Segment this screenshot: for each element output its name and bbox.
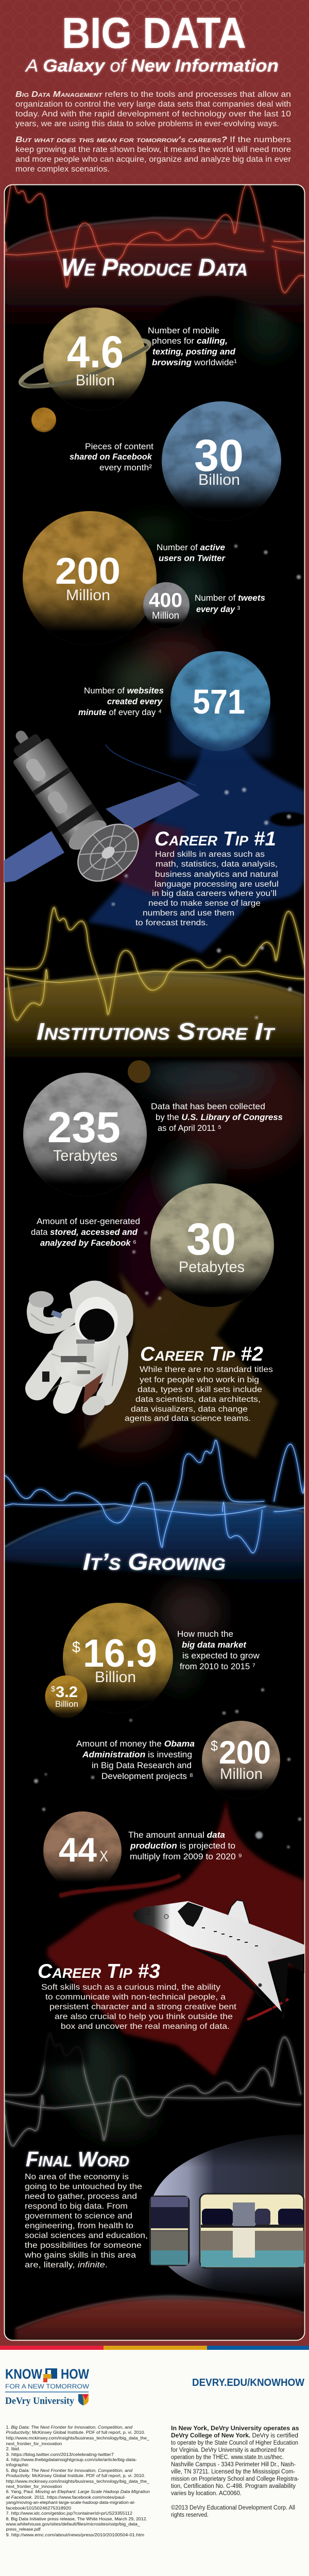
stat: 30 Petabytes: Petabytes [179,1259,245,1276]
text: final word paragraph: government to science and [25,2212,132,2221]
text: data production: multiply from 2009 to 2020 ⁹ [130,1852,242,1861]
stat: $16.9 Billion [72,1632,157,1686]
career tip 1: math, statistics, data analysis, [156,860,278,869]
energy waves [0,180,309,2146]
career tip 3: Career Tip #3 [38,1960,160,1982]
text: mobile phones [148,326,237,367]
visor [79,1309,114,1342]
text: Library of Congress: by the U.S. Library of Congress [156,1113,283,1122]
references: 2. Ibid. [6,2447,20,2451]
shuttle engine [269,1942,292,1958]
text: final word paragraph: No area of the economy is [25,2173,129,2181]
icon: small orange moon [31,408,56,432]
references: 5. Big Data: The Next Frontier for Innovation, Competition, and [6,2468,133,2473]
references: infographic [6,2463,29,2467]
accreditation statement: ville, TN 37211. Licensed by the Mississippi Com- [171,2469,295,2475]
career tip 2: Career Tip #2 [140,1343,263,1365]
planet: ochre [63,1603,173,1713]
thigh right [64,1370,77,1402]
logo: Know How: DeVry University [5,2396,74,2406]
subtitle: A Galaxy of New Information [25,56,279,76]
planet: grey [23,1073,147,1196]
stat: $3.2 Billion: 3.2 [56,1684,78,1701]
copyright: rights reserved. [171,2512,209,2518]
references: facebook/10150246275318920 [6,2506,72,2511]
icon: DeVry shield [78,2394,89,2405]
icon: satellite [0,720,200,893]
planet: rust [43,1811,122,1890]
stat: 400 Million [149,589,182,621]
red planet horizon [4,218,305,330]
logo: Know How [5,2366,90,2406]
career tip 3: persistent character and a strong creative bent [49,2003,237,2011]
stat: 44x: X [99,1848,108,1865]
references: next_frontier_for_innovation [6,2442,62,2446]
text: final word paragraph: who gains skills in this area [24,2251,136,2260]
stat: 30 Billion: Billion [198,471,240,488]
raised arm [35,1303,70,1326]
lowered hand [79,1392,109,1419]
planet: small amber [45,1675,88,1718]
career tip 1: language processing are useful [154,880,279,889]
text: Obama administration: Administration is investing [82,1750,192,1759]
planet: blue-green [170,651,271,757]
text: Facebook storage: data stored, accessed and [31,1228,138,1237]
references: www.whitehouse.gov/sites/default/files/microsites/ostp/big_data_ [5,2522,141,2527]
blue swoosh [88,724,307,953]
stat: 4.6 Billion: 4.6 [67,327,124,377]
references: 8. Big Data Initiative press release, The White House, March 29, 2012. [6,2517,147,2521]
accreditation statement: varies by location. AC0060. [171,2490,242,2497]
stat: $3.2 Billion: $ [51,1685,56,1693]
blue planet horizon [4,1502,305,1587]
career tip 1: Career Tip #1 [154,828,276,850]
career tip 1: need to make sense of large [148,899,261,908]
icon: space shuttle [133,1900,304,2020]
references: 3. https://blog.twitter.com/2013/celebrating-twitter7 [6,2452,114,2457]
references: 1. Big Data: The Next Frontier for Innovation, Competition, and [6,2425,133,2430]
text: data production: The amount annual data [128,1831,225,1840]
career tip 1: in big data careers where you’ll [152,889,277,898]
career tip 2: data, types of skill sets include [138,1385,262,1394]
accreditation statement: to operate by the State Council of Higher Education [171,2440,298,2446]
career tip 3: Soft skills such as a curious mind, the ability [41,1983,220,1992]
accreditation statement [171,2426,299,2497]
icon: astronaut [29,1281,133,1419]
stat: 400 Million: Million [152,611,179,621]
text: Facebook storage: analyzed by Facebook ⁶ [40,1239,136,1248]
accreditation statement: for Virginia. DeVry University is authorized for [171,2447,285,2453]
text: data production [128,1831,242,1861]
introduction paragraph 1: Big Data Management refers to the tools and processes that allow an [15,90,291,99]
stat: 235 Terabytes: Terabytes [53,1147,117,1164]
text: market growth: is expected to grow [182,1651,260,1660]
text: websites [78,686,164,717]
station left window [150,2196,189,2265]
stat: 400 Million: 400 [149,589,182,612]
stat: $16.9 Billion: 16.9 [83,1632,157,1675]
website url: DEVRY.EDU/KNOWHOW [192,2377,304,2388]
header: title and introduction [0,0,309,183]
text: market growth [177,1630,260,1671]
section: It's Growing [38,1549,304,2031]
scattered stars [34,545,301,1849]
accreditation statement: In New York, DeVry University operates as [171,2426,299,2432]
references: 4. http://www.thebigdatainsightgroup.com/site/article/big-data- [6,2458,137,2462]
introduction paragraph 2: more complex scenarios. [15,165,110,174]
text: websites: created every [107,697,163,706]
career tip 3: to communicate with non-technical people, a [45,1993,226,2002]
text: Facebook storage: Amount of user-generated [37,1217,140,1226]
stat: $16.9 Billion: Billion [95,1669,136,1686]
career tip 2: data visualizers, data change [131,1405,248,1414]
references [5,2425,150,2537]
glove [29,1291,54,1308]
text: Library of Congress: Data that has been collected [151,1102,265,1111]
planet: gold with ring [18,308,152,411]
career tip 1 [135,828,279,927]
text: final word paragraph: social sciences and education, [25,2231,148,2240]
career tip 3: box and uncover the real meaning of data. [61,2022,230,2031]
lowered arm [106,1340,119,1396]
planet: blue [162,401,281,521]
text: Library of Congress: as of April 2011 ⁵ [158,1124,221,1133]
accreditation statement: operation by the THEC. www.state.tn.us/thec. [171,2454,284,2461]
references: at Facebook. 2011. https://www.facebook.com/notes/paul- [6,2495,126,2500]
stat: $200 Million: 200 [219,1735,271,1771]
footer colour stripes [0,2346,309,2350]
nebula clouds [52,247,309,2136]
text: mobile phones: texting, posting and [152,347,236,357]
career tip 1: Hard skills in areas such as [155,850,265,859]
logo: Know How: FOR A NEW TOMORROW [5,2383,90,2390]
text: Obama administration: in Big Data Research and [92,1761,192,1770]
planet: tan [202,1721,280,1799]
career tip 2: data scientists, data architects, [135,1395,261,1404]
suit folds [31,1314,119,1391]
golden swoosh [77,1271,278,1458]
text: final word paragraph: the possibilities for someone [25,2241,142,2250]
stat: 30 Petabytes [179,1214,245,1276]
solar panels [4,782,200,883]
references: press_release.pdf [6,2527,41,2532]
section: We Produce Data [0,253,281,927]
text: market growth: How much the [177,1630,233,1639]
accreditation statement: tion, Certification No. C-498. Program availability [171,2483,296,2489]
references: 7. http://www.idc.com/getdoc.jsp?containerId=prUS23355112 [6,2511,133,2516]
text: mobile phones: Number of mobile [148,326,219,335]
shuttle cockpit [178,1902,203,1927]
flag patch [51,1310,62,1318]
yellow planet horizon [4,973,305,1061]
text: Facebook content [70,442,153,472]
shuttle tail [227,1900,250,1926]
stat: 235 Terabytes: 235 [47,1103,121,1151]
career tip 2: yet for people who work in big [140,1376,259,1384]
text: mobile phones: browsing worldwide¹ [152,358,237,367]
text: tweets: Number of tweets [195,594,265,603]
career tip 3 [38,1960,237,2031]
section: Institutions Store It [23,1018,283,1423]
references: http://www.mckinsey.com/insights/business_technology/big_data_the_ [6,2436,150,2441]
footer [0,2350,309,2576]
stat: $200 Million [211,1735,271,1783]
career tip 2: agents and data science teams. [125,1414,251,1423]
text: Twitter users: users on Twitter [159,554,226,563]
station hull [149,2134,304,2300]
red swoosh [47,1798,305,2076]
text: final word paragraph: respond to big data. From [25,2202,128,2211]
text: Obama administration: Amount of money the Obama [76,1739,195,1749]
career tip 3: are also crucial to help you think outside the [55,2012,233,2021]
red planet final horizon [15,2296,305,2341]
text: tweets [195,594,265,614]
shuttle body [133,1901,304,2012]
text: tweets: every day ³ [196,605,240,614]
copyright: ©2013 DeVry Educational Development Corp. All [171,2505,295,2511]
station hull shading [149,2134,304,2300]
stat: $16.9 Billion: $ [72,1639,80,1656]
shuttle wing shadow [191,1947,304,2020]
copyright [171,2505,295,2518]
planet: beige [150,1183,274,1307]
introduction paragraph 1 [15,90,291,128]
heading: Institutions Store It [37,1018,276,1045]
career tip 2 [125,1343,273,1423]
planet: small grey moon [143,582,190,629]
chest controls [42,1340,103,1404]
text: Facebook content: every month² [99,463,152,472]
helmet [75,1297,118,1343]
stat: 200 Million: 200 [55,551,121,592]
text: Library of Congress [151,1102,283,1133]
shuttle details [146,1908,258,1946]
references: http://www.mckinsey.com/insights/business_technology/big_data_the_ [6,2479,150,2484]
text: Twitter users [157,543,226,563]
text: final word paragraph [24,2173,148,2269]
text: final word paragraph: going to be untouched by the [25,2182,142,2191]
heading: It’s Growing [83,1549,226,1575]
station right window [200,2194,304,2268]
stat: $200 Million: Million [220,1766,263,1783]
logo mark [43,2368,57,2382]
stat: 30 Petabytes: 30 [186,1214,236,1264]
satellite dish [67,812,149,893]
accreditation statement: DeVry College of New York. DeVry is certified [171,2433,298,2439]
accreditation statement: Nashville Campus - 3343 Perimeter Hill Dr., Nash- [171,2462,296,2468]
thigh left [37,1360,58,1388]
stat: 200 Million: Million [66,587,110,604]
references: next_frontier_for_innovation [6,2484,62,2489]
text: Obama administration: Development projects ⁸ [101,1772,193,1781]
logo: Know How: HOW [61,2366,89,2382]
text: Facebook storage [31,1217,140,1248]
career tip 1: numbers and use them [143,909,234,918]
planet: brown [23,511,157,645]
text: final word paragraph: are, literally, infinite . [25,2261,108,2269]
introduction paragraph 2: But what does this mean for tomorrow’s careers? If the numbers [15,135,291,144]
logo: Know How: KNOW [5,2366,42,2382]
introduction paragraph 1: today. And with the rapid development of technology over the last 10 [15,110,291,118]
text: Facebook content: Pieces of content [85,442,153,451]
text: websites: minute of every day ⁴ [78,708,162,717]
introduction paragraph 2: keep growing at the rate shown below, it means the world will need more [15,145,291,154]
text: Obama administration [76,1739,195,1781]
stat: $200 Million: $ [211,1738,218,1754]
introduction paragraph 1: years, we are using this data to solve problems in ever-evolving ways. [15,120,279,128]
torso [52,1323,118,1387]
stat: 4.6 Billion: Billion [76,372,115,389]
stat: 30 Billion: 30 [194,431,244,481]
text: mobile phones: phones for calling, [152,336,228,346]
text: Facebook content: shared on Facebook [70,452,152,462]
text: final word paragraph: need to gather, process and [25,2192,137,2201]
introduction paragraph 2 [15,135,291,174]
stat: 571: 571 [193,683,245,721]
career tip 1: business analytics and natural [155,870,278,879]
references: Productivity; McKinsey Global Institute. PDF of full report, p. vi. 2010. [6,2473,145,2478]
introduction paragraph 2: and more people who can acquire, organize and analyze big data in ever [15,155,291,164]
satellite body [0,720,111,856]
career tip 1: to forecast trends. [135,919,208,927]
heading: Final Word [26,2147,129,2171]
references: Productivity; McKinsey Global Institute. PDF of full report, p. vi. 2010. [6,2430,145,2435]
stat: $3.2 Billion: Billion [55,1699,78,1709]
section: Final Word [24,2134,304,2300]
accreditation statement: mission on Proprietary School and College Registra- [171,2476,299,2482]
stat: 44x: 44 [59,1831,97,1869]
title: BIG DATA [62,9,246,57]
text: data production: production is projected to [130,1841,235,1851]
space station [149,2134,304,2300]
heading: We Produce Data [61,253,248,281]
text: market growth: big data market [182,1640,247,1650]
text: Twitter users: Number of active [157,543,225,552]
introduction paragraph 1: organization to control the very large data sets that companies deal with [15,100,291,109]
backpack [70,1281,133,1342]
stat: $3.2 Billion [51,1684,78,1709]
text: market growth: from 2010 to 2015 ⁷ [180,1662,255,1671]
text: websites: Number of websites [84,686,164,696]
references: yang/moving-an-elephant-large-scale-hadoop-data-migration-at- [6,2500,135,2505]
references: 6. Yang, Paul. Moving an Elephant: Large Scale Hadoop Data Migration [6,2489,150,2494]
references: 9. http://www.emc.com/about/news/press/2010/20100504-01.htm [6,2533,144,2537]
text: final word paragraph: engineering, from health to [25,2222,133,2230]
career tip 2: While there are no standard titles [140,1365,273,1374]
icon: faint orange moon [128,1060,150,1083]
